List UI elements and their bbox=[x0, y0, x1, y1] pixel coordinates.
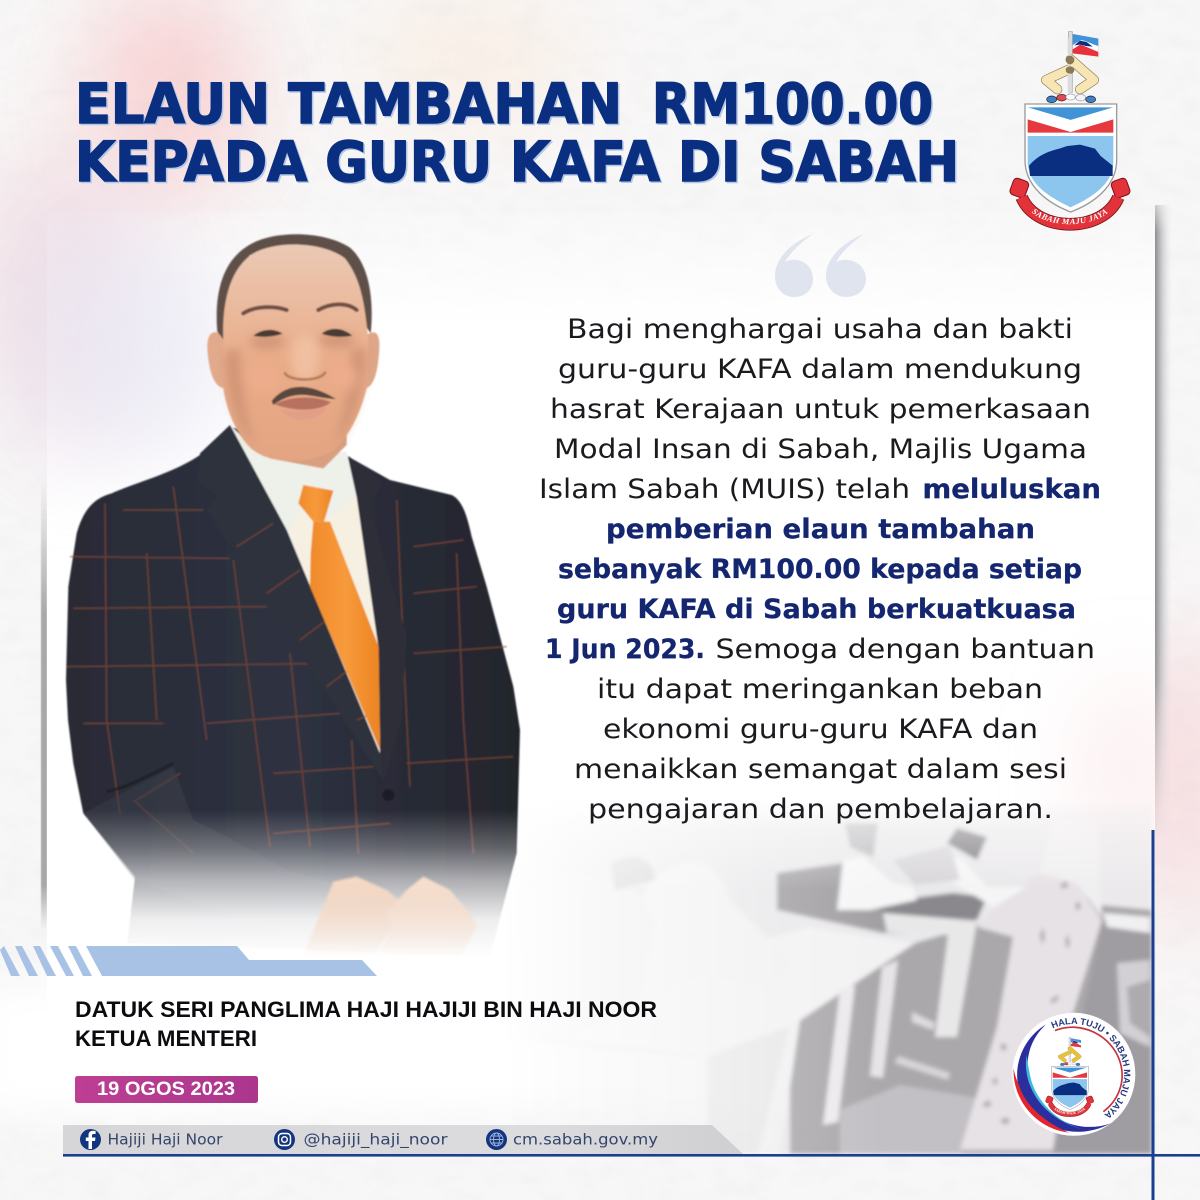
logo crest: SABAH MAJU JAYA bbox=[1054, 1108, 1086, 1114]
text block: quote: ekonomi guru-guru KAFA dan bbox=[603, 714, 1038, 745]
horizontal rule under footer bbox=[63, 1154, 1200, 1157]
far dark table bbox=[777, 863, 975, 933]
icon: facebook bbox=[80, 1129, 101, 1150]
background photo: classroom, faded greyscale bbox=[608, 818, 1155, 1154]
plaid lines bbox=[67, 487, 513, 853]
badge: Hala Tuju Sabah Maju Jaya logo bbox=[1012, 1012, 1136, 1136]
forearm highlight bbox=[84, 768, 234, 880]
title: KEPADA GURU KAFA DI SABAH bbox=[76, 132, 960, 196]
text block: quote: guru-guru KAFA dalam mendukung bbox=[558, 354, 1082, 385]
text block: quote: itu dapat meringankan beban bbox=[597, 674, 1043, 705]
decorative banner stripes bbox=[0, 946, 377, 976]
neck bbox=[243, 412, 347, 468]
quote mark icon bbox=[775, 234, 866, 297]
text block: quote: 1 Jun 2023. bbox=[545, 634, 705, 665]
text block: quote: pemberian elaun tambahan bbox=[606, 514, 1035, 545]
title: RM100.00 bbox=[654, 74, 934, 138]
name and position: KETUA MENTERI bbox=[75, 1026, 257, 1051]
icon: globe bbox=[486, 1129, 507, 1150]
vertical rule at right bbox=[1152, 830, 1154, 1200]
lapel left bbox=[198, 425, 383, 780]
sleeve fold bbox=[107, 763, 173, 792]
back wall bbox=[1099, 878, 1152, 912]
name and position: DATUK SERI PANGLIMA HAJI HAJIJI BIN HAJI NOOR bbox=[75, 997, 657, 1022]
hair bbox=[217, 234, 372, 342]
ears bbox=[207, 332, 225, 388]
panel: white quote card with shadow bbox=[0, 180, 1172, 1154]
tie bbox=[298, 485, 333, 522]
text block: quote: pengajaran dan pembelajaran. bbox=[588, 794, 1053, 825]
face bbox=[223, 244, 368, 461]
text block: quote: Islam Sabah (MUIS) telah bbox=[539, 474, 910, 505]
icon: instagram bbox=[274, 1129, 295, 1150]
middle table bbox=[873, 893, 987, 920]
logo ring text: HALA TUJU • SABAH MAJU JAYA bbox=[1051, 1018, 1130, 1118]
text block: quote: Bagi menghargai usaha dan bakti bbox=[567, 314, 1073, 345]
nose bbox=[285, 373, 325, 380]
eyes bbox=[253, 330, 283, 337]
footer: social links band: Hajiji Haji Noor bbox=[108, 1130, 223, 1148]
footer: social links band bbox=[63, 1125, 743, 1154]
hands bbox=[308, 876, 476, 950]
date badge bbox=[75, 1076, 258, 1103]
text block: quote bbox=[539, 314, 1101, 825]
classroom floor in shadow bbox=[788, 900, 1152, 1154]
teacher standing bbox=[960, 873, 1102, 1150]
text block: quote: sebanyak RM100.00 kepada setiap bbox=[558, 554, 1082, 585]
head bbox=[207, 234, 379, 468]
photo: portrait of the Chief Minister bbox=[66, 234, 520, 963]
teacher speckles bbox=[982, 881, 1081, 1125]
date badge: 19 OGOS 2023 bbox=[97, 1078, 235, 1100]
footer: social links band: @hajiji_haji_noor bbox=[304, 1130, 448, 1150]
text block: quote: Semoga dengan bantuan bbox=[716, 634, 1095, 665]
facial shading bbox=[225, 332, 366, 445]
icon: Sabah coat of arms bbox=[1010, 31, 1130, 231]
long white table bbox=[724, 932, 912, 1050]
text block: quote: guru KAFA di Sabah berkuatkuasa bbox=[557, 594, 1076, 625]
seated students at middle table bbox=[837, 857, 917, 910]
title: ELAUN TAMBAHAN bbox=[75, 72, 622, 136]
lapel right bbox=[348, 456, 406, 734]
title: KEPADA GURU KAFA DI SABAH bbox=[75, 130, 959, 194]
shirt bbox=[230, 425, 380, 760]
title: ELAUN TAMBAHAN bbox=[76, 74, 624, 138]
text block: quote: Modal Insan di Sabah, Majlis Ugama bbox=[554, 434, 1087, 465]
coat button bbox=[382, 789, 394, 801]
title: RM100.00 bbox=[652, 72, 933, 136]
footer: social links band: cm.sabah.gov.my bbox=[513, 1130, 658, 1148]
moustache bbox=[272, 387, 336, 405]
eyebrows bbox=[243, 307, 287, 313]
right of teacher bbox=[1053, 920, 1152, 1154]
text block: quote: hasrat Kerajaan untuk pemerkasaan bbox=[550, 394, 1091, 425]
text block: quote: menaikkan semangat dalam sesi bbox=[574, 754, 1067, 785]
icon: Sabah coat of arms: SABAH MAJU JAYA bbox=[1032, 209, 1108, 224]
text block: quote: meluluskan bbox=[922, 474, 1101, 505]
title bbox=[75, 72, 960, 196]
crescent swoosh bbox=[1014, 1024, 1122, 1133]
mouth bbox=[275, 398, 331, 410]
jacket bbox=[66, 427, 520, 957]
name and position bbox=[75, 997, 657, 1051]
seated students at near table bbox=[620, 863, 790, 1000]
